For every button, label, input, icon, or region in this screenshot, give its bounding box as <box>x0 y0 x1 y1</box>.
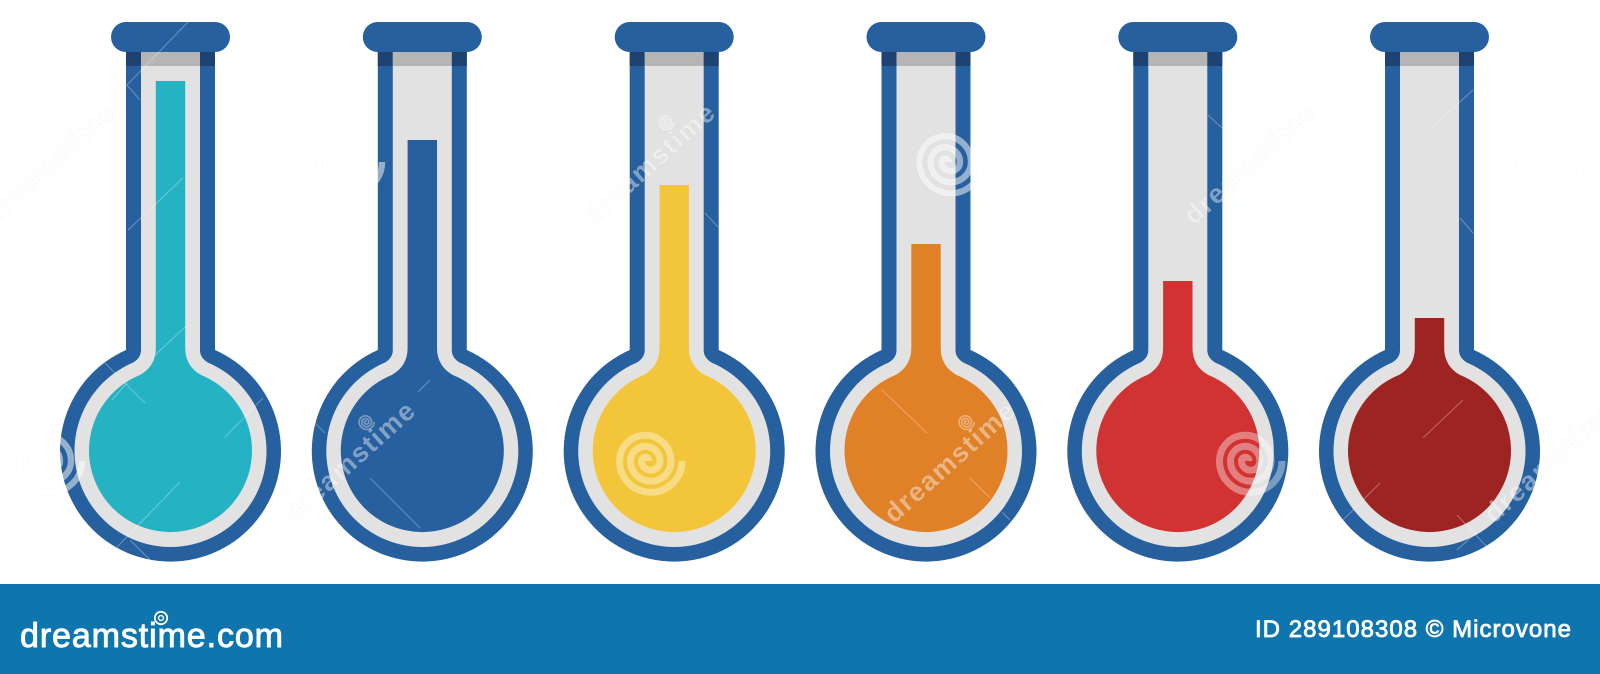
watermark hairlines <box>105 22 1487 560</box>
glass interior <box>1334 52 1526 547</box>
cap <box>866 22 986 52</box>
dark red liquid <box>1348 318 1511 532</box>
thermometer 5: red <box>1067 22 1288 562</box>
thermometer 4: orange <box>816 22 1036 562</box>
logo spiral centre <box>159 616 163 620</box>
thermometer 2: blue <box>312 22 533 562</box>
thermometer 1: teal <box>60 22 281 562</box>
thermometer 3: yellow <box>564 22 785 562</box>
cap <box>1118 22 1237 52</box>
glass outline <box>1319 52 1540 562</box>
glass interior <box>326 52 518 547</box>
yellow liquid <box>593 185 756 532</box>
thermometer 6: dark red <box>1319 22 1540 562</box>
neck shadow <box>882 52 970 66</box>
glass outline <box>816 52 1036 562</box>
neck shadow <box>126 52 215 66</box>
watermark spirals <box>20 136 1582 492</box>
glass outline <box>312 52 533 562</box>
neck shadow <box>630 52 719 66</box>
cap <box>363 22 482 52</box>
watermark text: dreamstime <box>578 98 721 230</box>
orange liquid <box>844 244 1008 532</box>
neck shadow <box>378 52 467 66</box>
logo spiral icon <box>155 612 167 624</box>
watermark text: dreamstime <box>878 396 1021 528</box>
glass outline <box>1067 52 1288 562</box>
neck shadow <box>1385 52 1474 66</box>
glass outline <box>60 52 281 562</box>
glass outline <box>564 52 785 562</box>
cap <box>1370 22 1489 52</box>
footer banner <box>0 584 1600 674</box>
image credit: ID 289108308 © Microvone <box>1255 616 1571 643</box>
watermark text: dreamstime <box>278 396 421 528</box>
glass interior <box>578 52 770 547</box>
cap <box>111 22 230 52</box>
red liquid <box>1096 281 1259 532</box>
teal liquid <box>89 81 252 532</box>
watermark small logo marks <box>59 116 1574 429</box>
glass interior <box>1082 52 1274 547</box>
watermark text <box>0 98 1600 528</box>
site logo text: dreamstime.com <box>20 617 283 655</box>
banner background <box>0 584 1600 674</box>
neck shadow <box>1133 52 1222 66</box>
glass interior <box>830 52 1022 547</box>
glass interior <box>74 52 266 547</box>
watermark text: dreamstime <box>1178 98 1321 230</box>
blue liquid <box>341 140 504 532</box>
cap <box>615 22 734 52</box>
